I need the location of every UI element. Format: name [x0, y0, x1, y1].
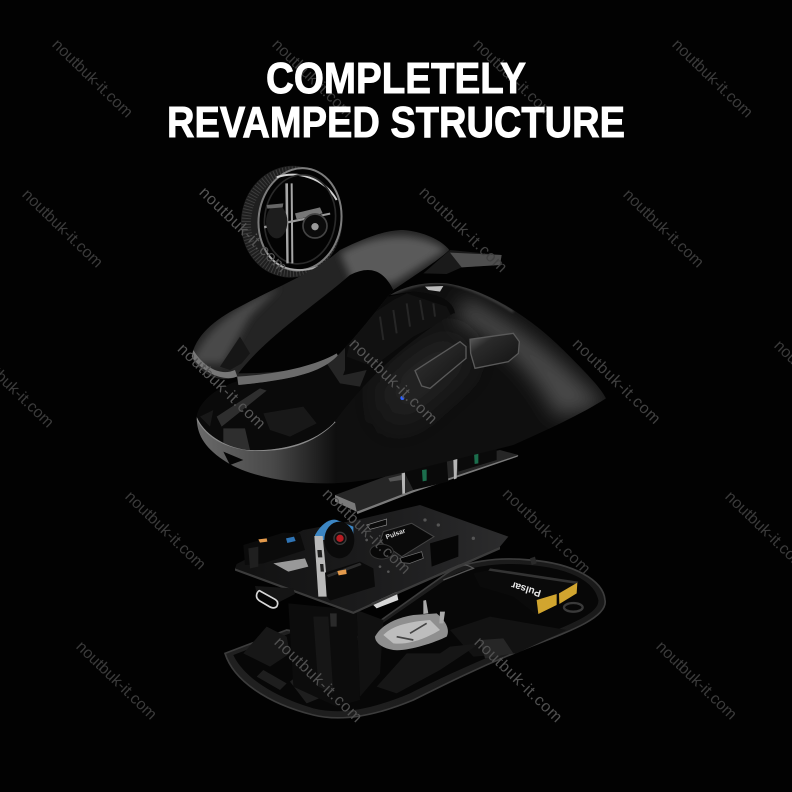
watermarks: noutbuk-it.com: [48, 36, 136, 121]
watermarks: noutbuk-it.com: [18, 186, 106, 271]
watermarks: noutbuk-it.com: [668, 36, 756, 121]
wires: [443, 565, 473, 580]
overlay watermarks on upper assembly: noutbuk-it.com: [196, 184, 290, 276]
overlay watermarks on lower assembly: noutbuk-it.com: [499, 486, 593, 578]
main PCB: [235, 505, 508, 614]
connector under PCB: [370, 592, 398, 608]
overlay watermarks on upper assembly: noutbuk-it.com: [416, 184, 510, 276]
chip with brand label: Pulsar: [385, 528, 407, 541]
watermarks: noutbuk-it.com: [268, 36, 356, 121]
overlay watermarks on lower assembly: noutbuk-it.com: [271, 634, 365, 726]
wheel bracket plate: [423, 250, 502, 274]
status LED: [400, 396, 404, 400]
title: [167, 55, 625, 147]
side button front: [470, 333, 519, 368]
watermarks: noutbuk-it.com: [619, 186, 707, 271]
battery: [473, 568, 578, 615]
internal cavity: [197, 292, 455, 450]
watermarks: noutbuk-it.com: [72, 638, 160, 723]
battery brand label: Pulsar: [510, 579, 543, 598]
mouse upper assembly: wheel, top shell, body: [174, 159, 663, 487]
title: COMPLETELY: [266, 55, 526, 103]
transparent lens: [375, 600, 448, 650]
title: REVAMPED STRUCTURE: [167, 99, 625, 147]
sensor with blue tab: [314, 520, 354, 597]
gold contacts: [537, 583, 577, 614]
watermarks: noutbuk-it.com: [121, 488, 209, 573]
overlay watermarks on upper assembly: [174, 184, 663, 433]
top shell: [192, 230, 449, 385]
overlay watermarks on lower assembly: [271, 486, 593, 726]
overlay watermarks on upper assembly: noutbuk-it.com: [174, 341, 268, 433]
right connector block: [430, 535, 458, 567]
main body shell: [193, 283, 607, 487]
watermarks: noutbuk-it.com: [652, 638, 740, 723]
mouse lower assembly: base case, PCB, battery: [225, 442, 605, 726]
scroll wheel: [234, 159, 350, 284]
front switch: [325, 562, 375, 601]
bracket holes: [450, 253, 502, 267]
metal strip plate: [335, 442, 518, 514]
overlay watermarks on upper assembly: noutbuk-it.com: [346, 336, 440, 428]
support pillars: [288, 603, 383, 707]
USB-C port: [255, 586, 295, 608]
base case: [225, 557, 605, 718]
side button rear: [415, 342, 466, 388]
overlay watermarks on upper assembly: noutbuk-it.com: [569, 336, 663, 428]
overlay watermarks on lower assembly: noutbuk-it.com: [471, 634, 565, 726]
overlay watermarks on lower assembly: noutbuk-it.com: [319, 486, 413, 578]
rear switch: [243, 533, 308, 572]
chip with brand label: [370, 523, 434, 563]
watermarks: noutbuk-it.com: [469, 36, 557, 121]
